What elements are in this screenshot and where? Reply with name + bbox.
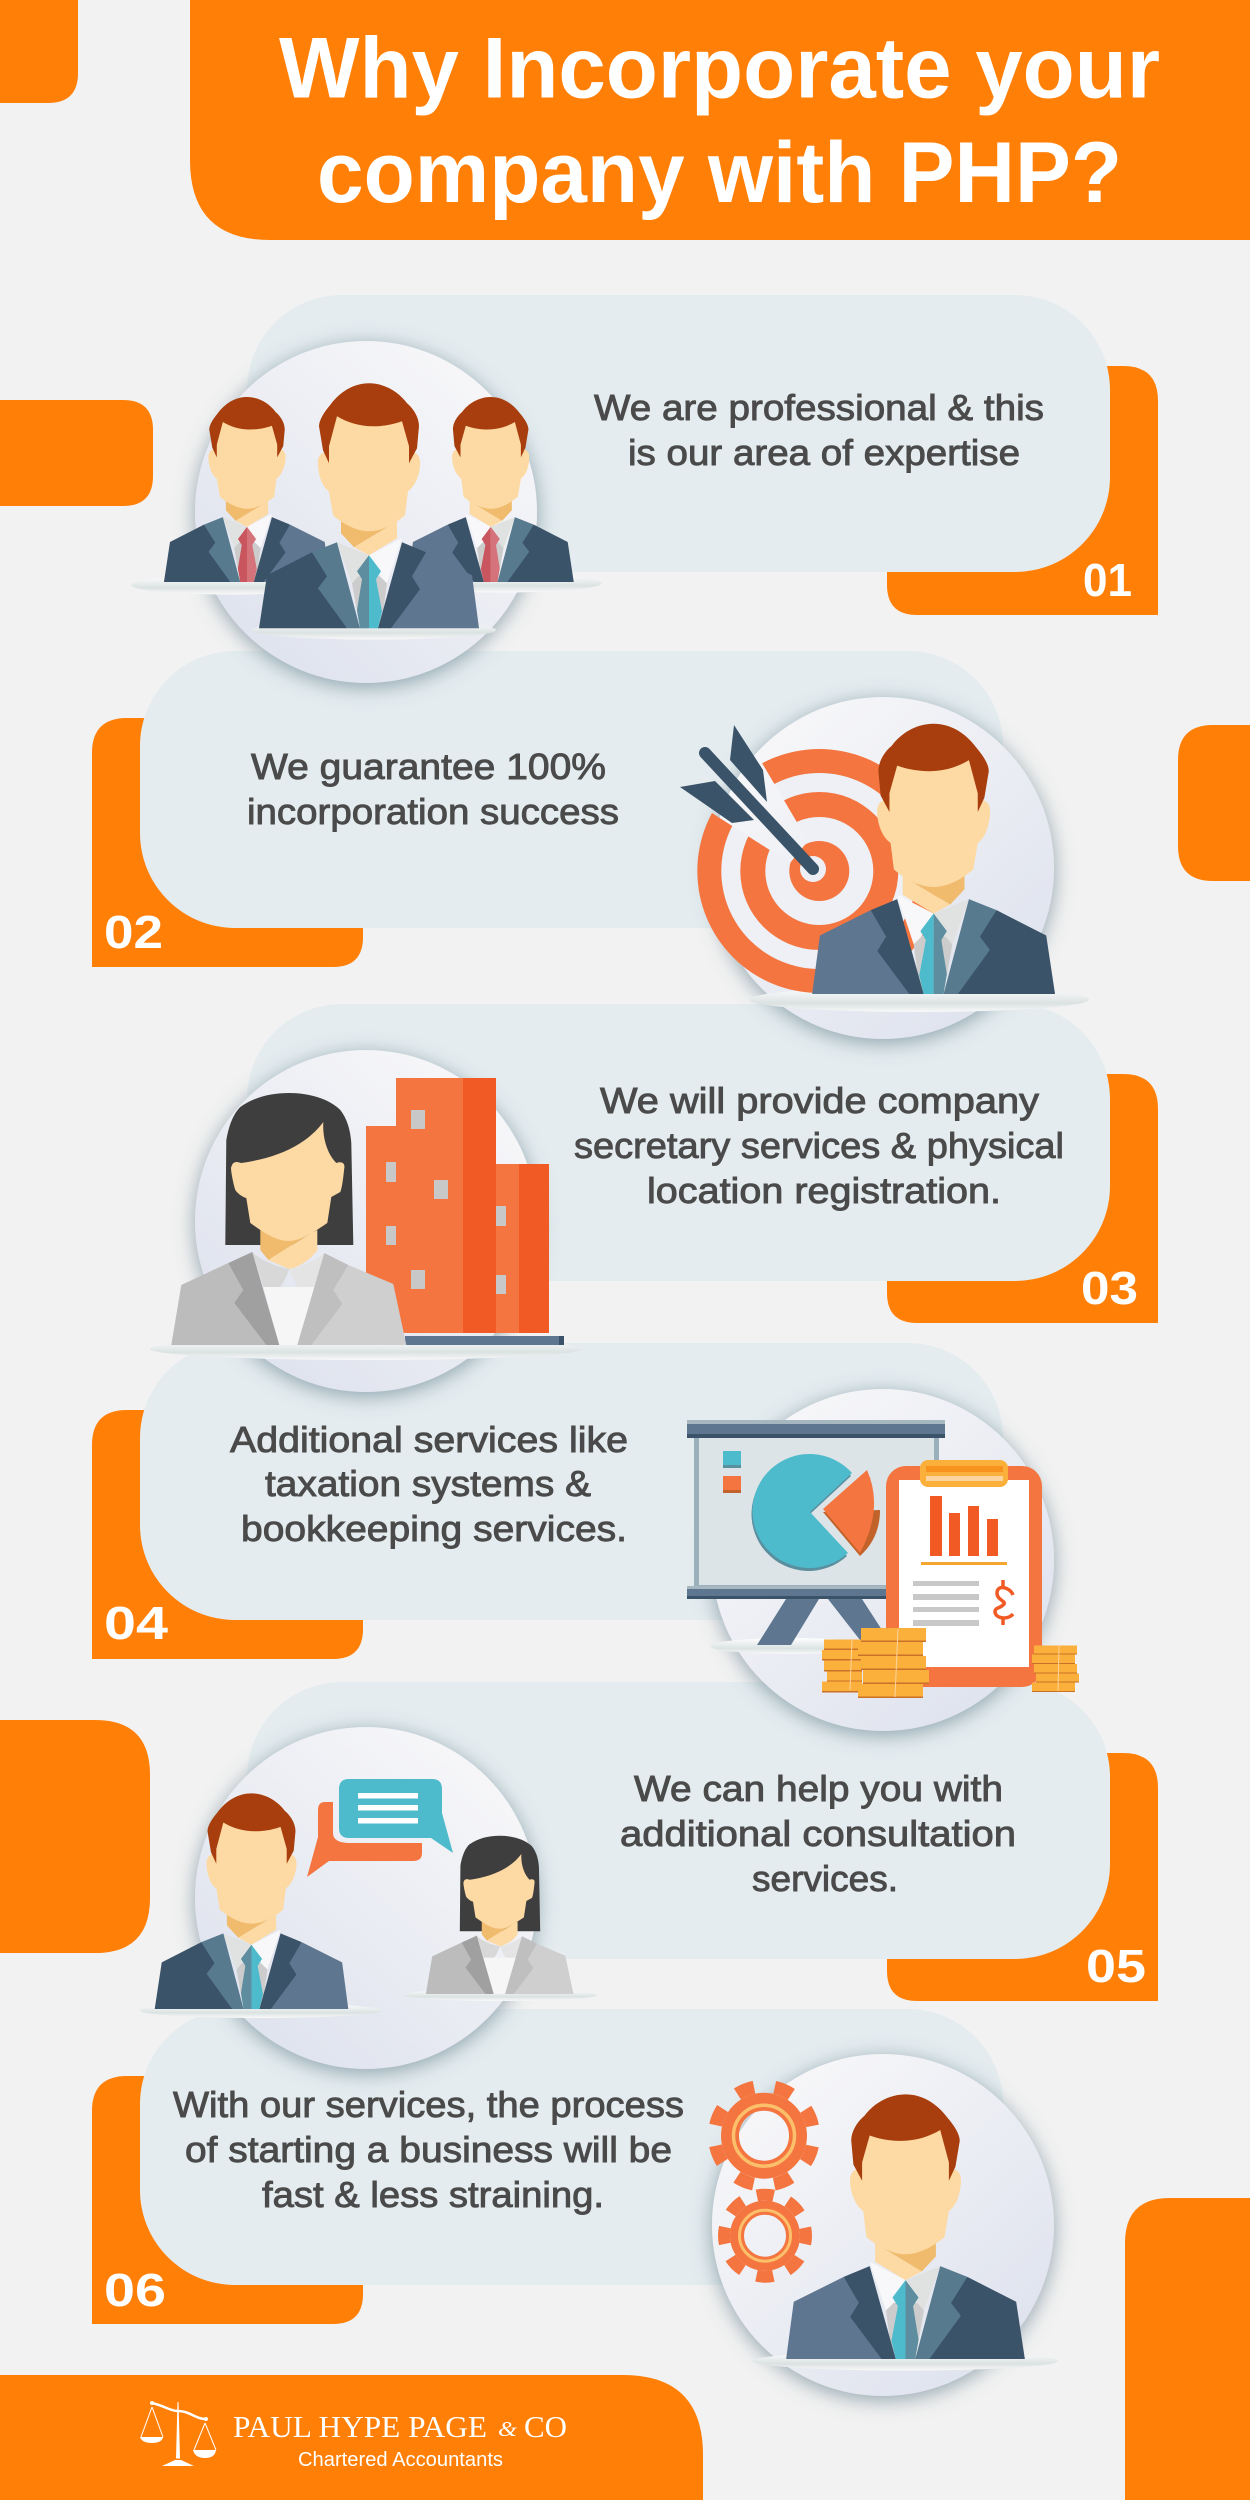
text 03: secretary services & physical — [574, 1125, 1064, 1166]
text 03 — [574, 1080, 1064, 1211]
tagline: Chartered Accountants — [298, 2449, 503, 2471]
card 06 — [140, 2009, 1003, 2285]
panel: step 02 — [92, 651, 1003, 967]
card 01 — [247, 295, 1110, 572]
text 03: We will provide company — [600, 1080, 1039, 1121]
number 02: 02 — [104, 906, 163, 958]
decorative block: right upper — [1178, 725, 1250, 881]
card 05 — [247, 1682, 1110, 1959]
text 06: of starting a business will be — [185, 2129, 672, 2170]
speech bubble: orange — [307, 1802, 422, 1877]
text 05: We can help you with — [634, 1768, 1003, 1809]
text 05 — [620, 1768, 1016, 1899]
decorative block: right lower — [1125, 2198, 1250, 2500]
title: company with PHP? — [317, 125, 1122, 221]
icon: woman with office building — [150, 1050, 582, 1392]
icon: scales of justice logo — [140, 2401, 216, 2466]
number tab 05 — [887, 1753, 1158, 2001]
text 01: is our area of expertise — [628, 432, 1020, 473]
company name: & — [498, 2417, 518, 2441]
footer banner — [0, 2375, 703, 2500]
text 02 — [247, 746, 619, 832]
number 06: 06 — [104, 2264, 166, 2316]
number tab 01 — [887, 366, 1158, 615]
text 04: Additional services like — [230, 1419, 628, 1460]
number 05: 05 — [1086, 1940, 1146, 1992]
icon: man with target and arrow — [680, 697, 1089, 1039]
text 03: location registration. — [647, 1170, 1001, 1211]
text 02: We guarantee 100% — [251, 746, 606, 787]
text 06: With our services, the process — [173, 2084, 684, 2125]
number 03: 03 — [1081, 1262, 1138, 1314]
title — [279, 20, 1160, 221]
panel: step 04 — [92, 1343, 1003, 1659]
text 05: additional consultation — [620, 1813, 1016, 1854]
text 01: We are professional & this — [594, 387, 1044, 428]
card 02 — [140, 651, 1003, 928]
company name: PAUL HYPE PAGE — [233, 2409, 487, 2444]
title banner — [190, 0, 1250, 240]
icon: consultation conversation — [140, 1727, 597, 2069]
text 06: fast & less straining. — [262, 2174, 604, 2215]
panel: step 06 — [92, 2009, 1003, 2324]
number tab 03 — [887, 1074, 1158, 1323]
icon: man with gears — [712, 2054, 1058, 2396]
icon: presentation board with clipboard and coins — [687, 1389, 1079, 1731]
number tab 02 — [92, 718, 363, 967]
card 04 — [140, 1343, 1003, 1620]
number 04: 04 — [104, 1597, 169, 1649]
number 01: 01 — [1083, 554, 1132, 606]
speech bubble: teal — [339, 1779, 453, 1853]
text 04 — [230, 1419, 628, 1549]
icon: three professionals — [131, 341, 602, 683]
text 06 — [173, 2084, 684, 2215]
number tab 04 — [92, 1410, 363, 1659]
icon: gear large — [714, 2086, 814, 2185]
text 05: services. — [752, 1858, 898, 1899]
text 04: taxation systems & — [265, 1463, 591, 1504]
decorative block: left upper — [0, 400, 153, 506]
panel: step 01 — [247, 295, 1158, 615]
text 01 — [594, 387, 1044, 473]
panel: step 03 — [247, 1004, 1158, 1323]
panel: step 05 — [247, 1682, 1158, 2001]
number tab 06 — [92, 2076, 363, 2324]
title: Why Incorporate your — [279, 20, 1160, 116]
company name: CO — [524, 2409, 567, 2444]
text 02: incorporation success — [247, 791, 619, 832]
card 03 — [247, 1004, 1110, 1281]
decorative block: left lower — [0, 1720, 150, 1953]
text 04: bookkeeping services. — [241, 1508, 627, 1549]
decorative block: top left — [0, 0, 78, 103]
icon: gear small — [724, 2195, 806, 2277]
